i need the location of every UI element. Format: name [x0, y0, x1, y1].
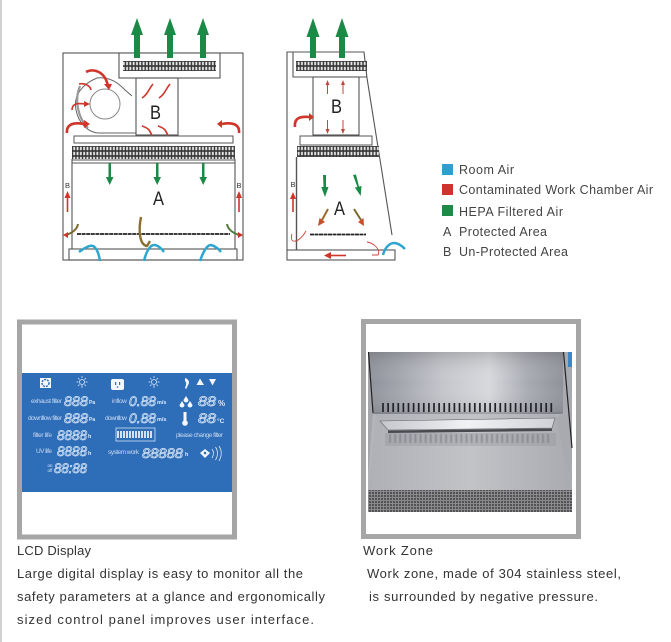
- icon: light: [76, 376, 88, 388]
- side B labels and arrows: B: [65, 181, 70, 190]
- base sill: [69, 249, 237, 260]
- red inlet arrow: [295, 113, 314, 127]
- side B labels and arrows: B: [236, 181, 242, 190]
- page left edge rule: [0, 0, 2, 642]
- LCD row: on off timer: on: [48, 463, 53, 468]
- cabinet outer shell: [63, 53, 243, 260]
- LCD readout: system work: system work: [108, 449, 140, 456]
- heading: LCD Display: LCD Display: [17, 543, 92, 558]
- legend: protected area: A: [443, 225, 452, 239]
- legend: room air: Room Air: [459, 163, 514, 177]
- LCD display caption: safety parameters at a glance and ergonomically: [17, 589, 326, 604]
- LCD readout: system work: [108, 445, 189, 461]
- LCD row: UV life: UV life: [36, 448, 52, 455]
- LCD readout: temperature: °C: [217, 417, 225, 425]
- legend: un-protected area: B: [443, 245, 451, 259]
- blower fan housing: [75, 78, 136, 133]
- icon: filter level battery: [116, 428, 155, 441]
- icon: outlet: [111, 379, 124, 390]
- LCD row: exhaust filter: 0.88: [129, 393, 156, 409]
- left B label and arrow: [290, 180, 296, 212]
- side B labels and arrows: [64, 181, 242, 212]
- legend: HEPA filtered air: HEPA Filtered Air: [459, 205, 563, 219]
- un-protected area B: [313, 77, 359, 135]
- room air inflow arrows: [79, 245, 221, 261]
- icon: alarm speaker: [200, 446, 221, 461]
- LCD row: on off timer: off: [48, 468, 53, 473]
- supply HEPA filter: [72, 146, 235, 163]
- work chamber wall: [296, 157, 298, 250]
- perforated front grille: [368, 490, 572, 512]
- panel: LCD display screen: [22, 373, 232, 492]
- work chamber: [72, 159, 235, 249]
- back wall: [368, 352, 563, 414]
- LCD row: exhaust filter: Pa: [89, 400, 95, 406]
- left B label and arrow: B: [290, 180, 296, 189]
- icon: UV light: [148, 376, 160, 388]
- green downflow arrows: [321, 174, 362, 197]
- base return arrow: [324, 252, 346, 259]
- work chamber: A: [153, 188, 164, 210]
- LCD row: UV life: 8888: [57, 443, 87, 459]
- panel: LCD display frame: [20, 322, 234, 537]
- LCD row: UV life: h: [88, 451, 92, 457]
- LCD row: downflow filter: [28, 410, 166, 426]
- un-protected area B: B: [331, 96, 342, 118]
- LCD readout: system work: h: [185, 452, 189, 458]
- LCD row: downflow filter: 888: [64, 410, 88, 426]
- HEPA downflow arrows: [106, 163, 207, 185]
- LCD row: downflow filter: m/s: [157, 417, 166, 423]
- side view airflow diagram: [287, 18, 405, 260]
- legend: protected area: Protected Area: [459, 225, 547, 239]
- LCD readout: humidity: 88: [198, 393, 216, 409]
- LCD readout: system work: 88888: [142, 445, 183, 461]
- LCD description text: Large digital display is easy to monitor all the: [17, 566, 303, 581]
- LCD row: exhaust filter: inflow: [112, 398, 127, 405]
- LCD row: exhaust filter: [31, 393, 166, 409]
- legend: [442, 163, 653, 259]
- LCD display caption: [17, 543, 326, 627]
- front view airflow diagram: [63, 18, 243, 261]
- un-protected duct area B: [136, 78, 178, 135]
- HEPA exhaust arrows: [131, 18, 209, 58]
- work zone photo: [368, 352, 572, 512]
- work zone caption: is surrounded by negative pressure.: [369, 589, 598, 604]
- LCD row: filter life: 8888: [57, 427, 87, 443]
- LCD readout: humidity: %: [218, 399, 225, 408]
- LCD row: UV life: [36, 443, 92, 459]
- red fan arrows: [67, 70, 239, 133]
- LCD display caption: sized control panel improves user interface.: [17, 612, 314, 627]
- LCD row: filter life: h: [88, 434, 92, 440]
- base sill: [287, 250, 395, 260]
- icon: humidity drops: [180, 396, 192, 408]
- side walls: [368, 352, 572, 487]
- protected area A: [310, 198, 366, 234]
- LCD row: downflow filter: 0.88: [129, 410, 156, 426]
- panel: work zone frame: [364, 322, 578, 536]
- supply HEPA filter: [297, 146, 379, 157]
- room air inlet arrow: [383, 243, 405, 255]
- photo backdrop: [368, 352, 572, 512]
- LCD row: downflow filter: downflow filter: [28, 415, 63, 422]
- LCD row: filter life: filter life: [33, 432, 52, 439]
- exhaust slots: [383, 403, 551, 412]
- exhaust arrows: [306, 18, 348, 58]
- protected area A: A: [334, 198, 345, 220]
- work zone description text: Work zone, made of 304 stainless steel,: [367, 566, 621, 581]
- work surface floor: [368, 414, 572, 490]
- red duct arrows: [142, 84, 170, 136]
- LCD readout: temperature: 88: [198, 410, 216, 426]
- LCD row: downflow filter: Pa: [89, 417, 95, 423]
- blue indicator strip: [568, 352, 572, 367]
- icon: foot switch and arrows: [185, 378, 216, 389]
- LCD readout: humidity: [198, 393, 225, 409]
- legend: un-protected area: Un-Protected Area: [459, 245, 568, 259]
- red air arrows inside duct: [326, 80, 345, 134]
- contaminated air arrows: [63, 217, 243, 246]
- curved return arrows: [291, 231, 379, 255]
- LCD row: filter life: [33, 427, 92, 443]
- mixed air arrows: [318, 209, 364, 226]
- cabinet side shell: [287, 52, 392, 250]
- work zone caption: [363, 543, 621, 604]
- LCD row: exhaust filter: m/s: [157, 400, 166, 406]
- LCD label: please change filter: please change filter: [176, 432, 224, 439]
- LCD row: downflow filter: downflow: [105, 415, 127, 422]
- icon: thermometer: [182, 412, 188, 426]
- heading: Work Zone: Work Zone: [363, 543, 433, 558]
- icon: fan: [40, 378, 51, 388]
- supply plate: [300, 136, 372, 145]
- exhaust HEPA filter: [296, 61, 367, 71]
- LCD row: exhaust filter: 888: [64, 393, 88, 409]
- LCD readout: temperature: [198, 410, 225, 426]
- LCD row: exhaust filter: exhaust filter: [31, 398, 63, 405]
- supply plate: [74, 136, 233, 143]
- legend: contaminated work chamber air: Contaminated Work Chamber Air: [459, 183, 653, 197]
- un-protected duct area B: B: [150, 102, 161, 124]
- exhaust HEPA housing and filter: [119, 53, 220, 78]
- LCD row: on off timer: 88:88: [54, 460, 87, 476]
- tray lip: [380, 418, 555, 433]
